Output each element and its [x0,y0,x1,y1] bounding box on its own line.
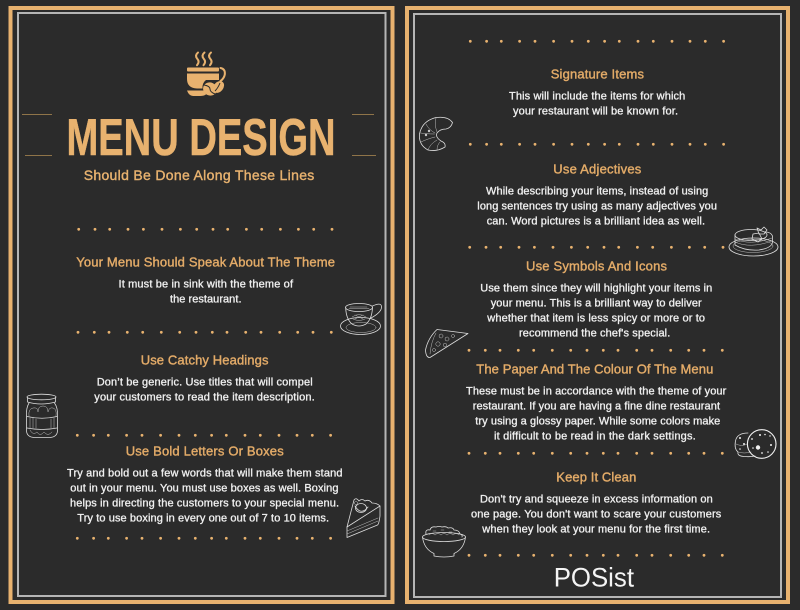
body text [67,467,342,524]
section: use symbols and icons [480,259,712,340]
dotted divider [77,228,333,231]
body text: your restaurant will be known for. [513,105,678,117]
illustration: croissant [419,117,452,151]
section: your menu should speak about the theme [76,254,335,305]
body text: This will include the items for which [509,90,685,102]
illustration: slice of pie [347,499,380,538]
subtitle: Should Be Done Along These Lines [84,167,314,183]
body text: Don’t be generic. Use titles that will compel [97,376,313,388]
heading: Use Adjectives [553,162,642,177]
section: use catchy headings [94,353,315,403]
panel: right menu page [407,8,788,602]
body text: your menu. This is a brilliant way to deliver [491,298,702,310]
body text: when they look at your menu for the first time. [481,523,710,535]
dotted divider [468,452,724,455]
heading: The Paper And The Colour Of The Menu [476,362,713,377]
body text [94,376,315,403]
left panel outer border [10,8,392,602]
section: the paper and the colour of the menu [466,362,727,443]
heading: Use Symbols And Icons [526,259,668,274]
body text [118,278,294,305]
body text: Try and bold out a few words that will make them stand [67,467,342,479]
section: signature items [509,67,685,117]
illustration: stack of pancakes [729,227,778,256]
title decoration lines [22,114,376,156]
body text: long sentences try using as many adjectives you [477,201,717,213]
dotted divider [469,40,725,43]
illustration: cookies [735,430,776,458]
body text: Try to use boxing in every one out of 7 to 10 items. [77,512,329,524]
body text [471,493,722,535]
body text: it difficult to be read in the dark settings. [494,431,696,443]
body text: whether that item is less spicy or more or to [486,313,705,325]
dotted divider [76,434,332,437]
body text: one page. You don't want to scare your customers [471,508,722,520]
dotted divider [468,349,724,352]
body text: the restaurant. [170,293,242,305]
body text: try using a glossy paper. While some colors make [475,416,720,428]
illustration: teacup on saucer [340,304,382,334]
illustration: pizza slice [426,330,468,358]
section: use adjectives [477,162,717,228]
body text: recommend the chef's special. [519,328,670,340]
heading: Keep It Clean [556,470,636,485]
right panel outer border [407,8,788,602]
illustration: jar [26,394,58,438]
body text: It must be in sink with the theme of [118,278,294,290]
dotted divider [468,554,724,557]
icon: coffee cup with beans [187,52,226,98]
logo: POSist: POSist [554,563,635,593]
body text [477,186,717,228]
body text: helps in directing the customers to your special menu. [70,497,339,509]
section: use bold letters or boxes [67,444,342,524]
dotted divider [469,143,725,146]
heading: Use Catchy Headings [141,353,269,368]
heading: Signature Items [551,67,644,82]
body text: can. Word pictures is a brilliant idea as well. [487,216,705,228]
dotted divider [76,537,332,540]
body text: restaurant. If you are having a fine dine restaurant [473,401,720,413]
body text [466,386,727,443]
body text: Don't try and squeeze in excess information on [480,493,713,505]
body text: Use them since they will highlight your items in [480,283,712,295]
section: keep it clean [471,470,722,535]
dotted divider [468,246,724,249]
body text: These must be in accordance with the theme of your [466,386,727,398]
heading: Your Menu Should Speak About The Theme [76,254,335,270]
title: MENU DESIGN [66,109,336,167]
panel: left menu page [10,8,392,602]
left panel inner border [18,13,386,596]
body text: out in your menu. You must use boxes as well. Boxing [70,482,339,494]
body text [509,90,685,117]
dotted divider [77,331,333,334]
illustration: bowl of salad [422,526,466,557]
right panel inner border [414,14,781,597]
body text [480,283,712,340]
body text: While describing your items, instead of using [486,186,708,198]
heading: Use Bold Letters Or Boxes [126,444,284,459]
body text: your customers to read the item description. [94,391,315,403]
